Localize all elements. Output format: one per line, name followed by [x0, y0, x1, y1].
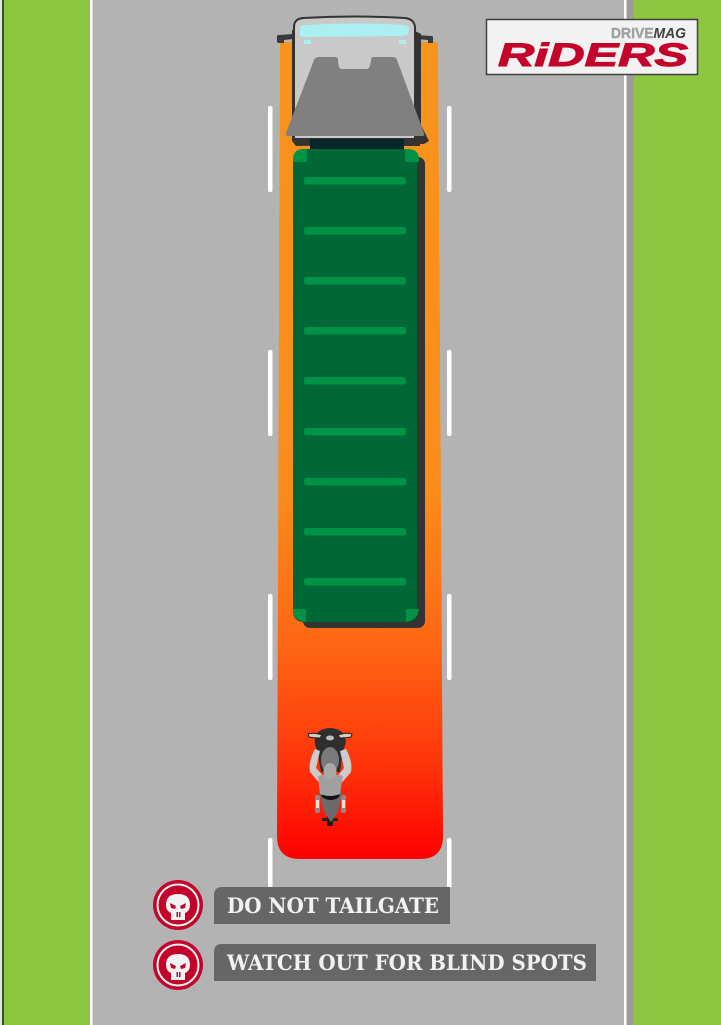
footpegs and exhausts [315, 795, 346, 821]
warning 2: watch out for blind spots: WATCH OUT FOR BLIND SPOTS [226, 951, 587, 976]
trailer corner lamps [293, 149, 419, 622]
icon: skull badge [153, 880, 203, 930]
hood and windscreen shade [286, 57, 424, 136]
rider head [324, 763, 336, 779]
truck mirrors [277, 34, 433, 43]
left grass verge [0, 0, 92, 1025]
windshield [300, 24, 409, 37]
cab shadow [292, 24, 429, 146]
rear wheel [327, 812, 333, 826]
cab [294, 16, 415, 139]
warning 2: watch out for blind spots [153, 940, 596, 990]
trailer shadow [303, 157, 425, 628]
truck [277, 16, 433, 628]
lane dashes [268, 106, 452, 888]
trailer slats [304, 177, 406, 586]
label [214, 887, 450, 924]
blind spot danger zone [277, 42, 443, 859]
logo: DRIVEMAG: DRIVEMAG [611, 26, 686, 42]
handlebars [308, 733, 352, 738]
cab rear connector [310, 139, 404, 150]
rider arms [310, 749, 326, 786]
icon: skull badge [153, 940, 203, 990]
warning 1: do not tailgate: DO NOT TAILGATE [227, 894, 439, 919]
logo [486, 20, 698, 74]
tank [321, 747, 339, 773]
rider torso [318, 774, 343, 796]
warning 1: do not tailgate [153, 880, 450, 930]
trailer [293, 149, 417, 622]
bike front [315, 728, 346, 772]
label [214, 944, 596, 981]
logo: RIDERS: RiDERS [498, 37, 689, 73]
motorcycle and rider [308, 728, 352, 826]
tail [319, 792, 342, 822]
right grass verge [624, 0, 721, 1025]
